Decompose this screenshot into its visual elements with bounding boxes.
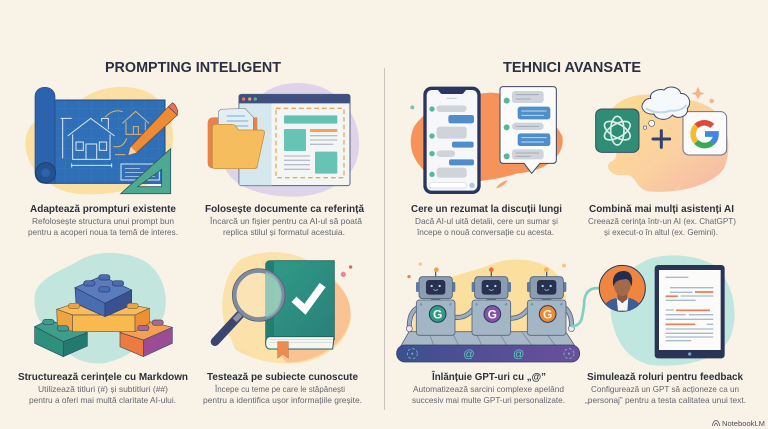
icon: robots on a conveyor belt: G xyxy=(543,307,552,321)
description: Configurează un GPT să acționeze ca un xyxy=(591,384,739,394)
icon: browser window with document layout and folder xyxy=(208,83,359,197)
icon: stacked building blocks xyxy=(34,253,172,363)
description xyxy=(28,216,178,237)
heading: Înlănțuie GPT-uri cu „@” xyxy=(431,370,546,383)
description: Dacă AI-ul uită detalii, cere un sumar și xyxy=(415,216,558,226)
description xyxy=(412,384,565,405)
heading: Adaptează prompturi existente xyxy=(30,204,176,215)
icon: book with check mark and magnifying glass xyxy=(215,252,352,363)
description xyxy=(415,216,558,237)
heading: Cere un rezumat la discuții lungi xyxy=(411,204,562,215)
icon: robots on a conveyor belt xyxy=(397,259,580,362)
description: pentru a acoperi noua ta temă de interes. xyxy=(28,227,178,237)
description xyxy=(203,384,362,405)
NotebookLM credit: NotebookLM xyxy=(722,419,765,428)
icon: robots on a conveyor belt: G xyxy=(488,307,497,321)
divider xyxy=(384,68,385,410)
description xyxy=(29,384,176,405)
panel: use documents as reference xyxy=(205,83,364,237)
heading: Combină mai mulți asistenți AI xyxy=(589,204,734,215)
heading: Simulează roluri pentru feedback xyxy=(587,372,743,383)
icon: robots on a conveyor belt: @ xyxy=(513,348,524,360)
description: Încarcă un fișier pentru ca AI-ul să poată xyxy=(209,216,362,226)
description xyxy=(209,216,362,237)
icon: blueprint with house, pencil and set square xyxy=(25,87,178,194)
description: începe o nouă conversație cu acesta. xyxy=(416,227,554,237)
section: tehnici avansate title: TEHNICI AVANSATE xyxy=(503,60,641,76)
panel: combine multiple AI assistants xyxy=(588,87,736,237)
panel: test on familiar subjects xyxy=(203,252,362,405)
description: pentru a oferi mai multă claritate AI-ului. xyxy=(29,395,176,405)
description: pentru a identifica ușor informațiile greșite. xyxy=(203,395,362,405)
description xyxy=(588,216,736,237)
description: Începe cu teme pe care le stăpânești xyxy=(214,384,345,394)
icon: phone and chat summary bubble xyxy=(410,87,563,194)
icon: ChatGPT and Google tiles with thought cloud xyxy=(596,87,728,192)
description: și execut-o în altul (ex. Gemini). xyxy=(604,227,718,237)
icon: robots on a conveyor belt: G xyxy=(433,307,442,321)
description: „personaj” pentru a testa calitatea unui text. xyxy=(585,395,746,405)
panel: simulate roles for feedback xyxy=(572,255,746,405)
description: Utilizează titluri (#) și subtitluri (##) xyxy=(38,384,168,394)
panel: structure with Markdown xyxy=(18,253,188,405)
heading: Structurează cerințele cu Markdown xyxy=(18,372,188,383)
section: prompting inteligent title: PROMPTING INTELIGENT xyxy=(105,60,281,76)
heading: Folosește documente ca referință xyxy=(205,204,364,215)
description: Creează cerința într-un AI (ex. ChatGPT) xyxy=(588,216,736,226)
description: Automatizează sarcini complexe apelând xyxy=(413,384,564,394)
description: replica stilul și formatul acestuia. xyxy=(223,227,345,237)
panel: chain GPTs with @ xyxy=(397,259,580,405)
icon: robots on a conveyor belt: @ xyxy=(463,348,475,360)
description: succesiv mai multe GPT-uri personalizate. xyxy=(412,395,565,405)
heading: Testează pe subiecte cunoscute xyxy=(207,372,358,383)
panel: summarize long chats xyxy=(410,87,563,237)
description: Refolosește structura unui prompt bun xyxy=(32,216,174,226)
description xyxy=(585,384,746,405)
icon: persona avatar reviewing a text on a tablet xyxy=(572,255,735,366)
panel: adapt existing prompts xyxy=(25,87,178,237)
